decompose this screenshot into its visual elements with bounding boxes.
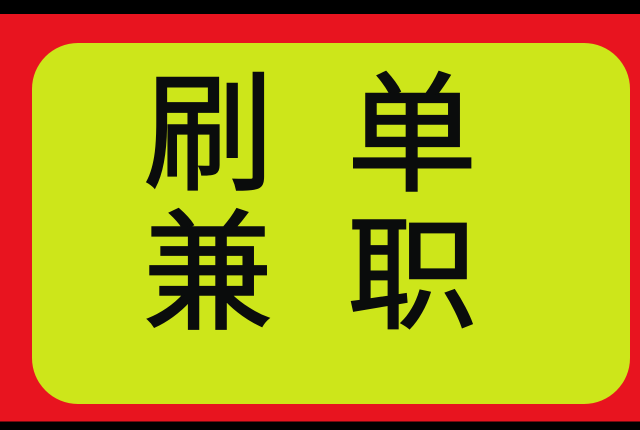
title text: 刷单兼职: 单 — [347, 62, 477, 208]
title text: 刷单兼职: 兼 — [143, 200, 273, 346]
title text: 刷单兼职: 职 — [347, 206, 477, 345]
title text: 刷单兼职 — [143, 62, 477, 346]
title text: 刷单兼职: 刷 — [144, 62, 274, 208]
yellow-green rounded panel — [32, 43, 630, 404]
